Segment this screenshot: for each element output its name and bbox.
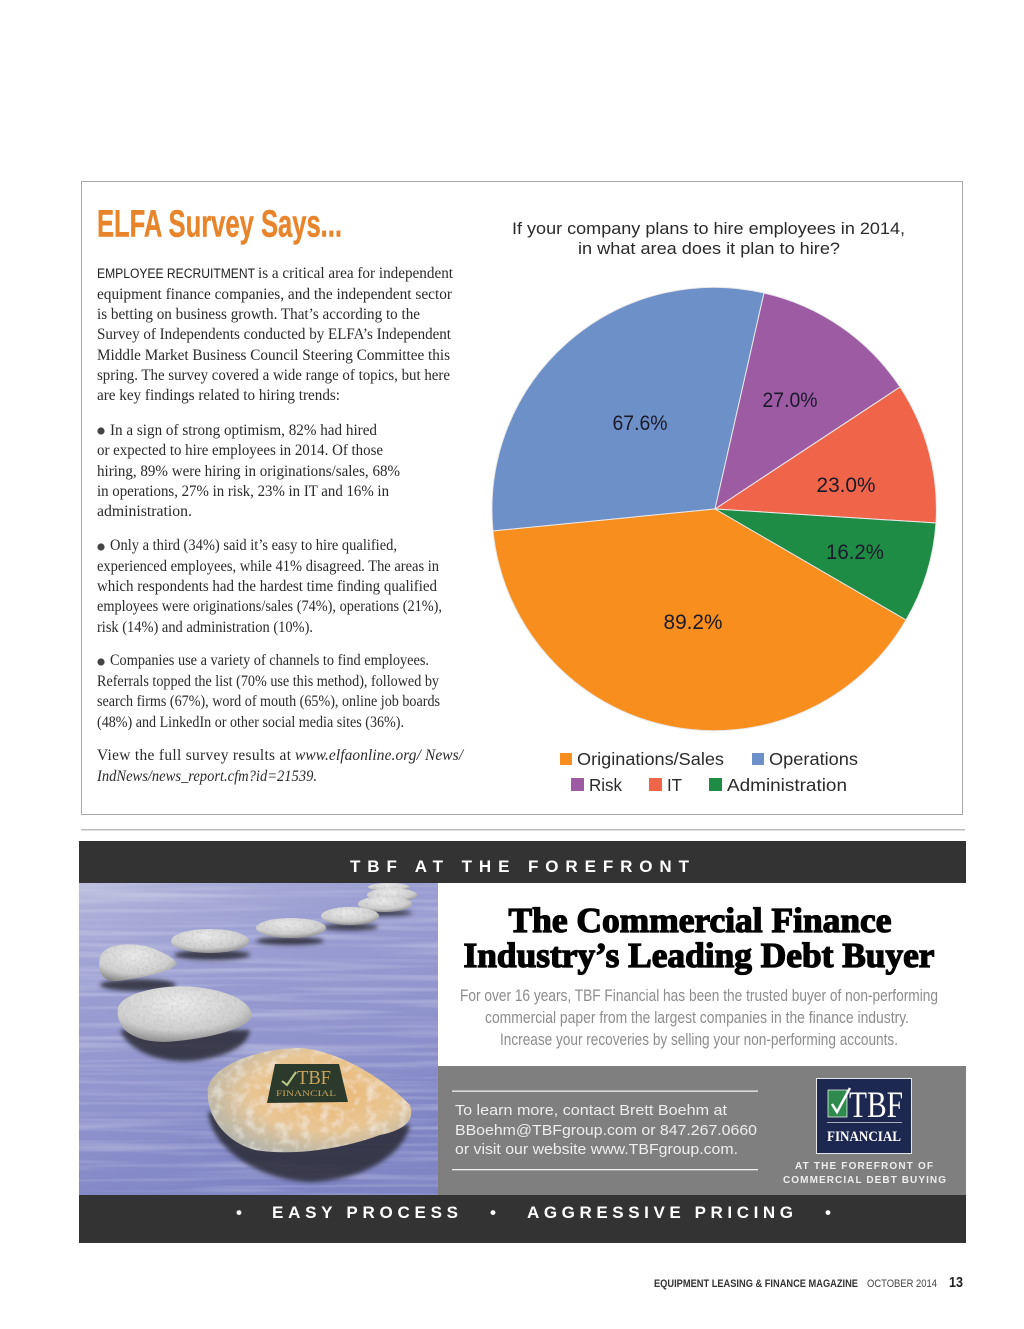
golden logo stone [208,1048,411,1152]
page footer: OCTOBER 2014 [867,1278,937,1290]
intro paragraph: EMPLOYEE RECRUITMENT [97,266,255,281]
chart title [512,219,905,258]
ad bottom banner text [236,1203,831,1222]
grey stones [99,883,417,1042]
logo tagline [783,1161,946,1186]
bullet: qualified employees: risk (14%) and administration (10%). [97,619,313,636]
stepping stones photo [79,883,438,1195]
ad description: commercial paper from the largest companies in the finance industry. [485,1008,909,1027]
stone logo: TBF [297,1067,331,1089]
ad bottom banner text: • [825,1203,831,1222]
chart legend: Risk [589,775,622,795]
ad contact panel [438,1066,966,1195]
intro paragraph: are key findings related to hiring trends: [97,387,340,404]
ad bottom banner text: • [236,1203,242,1222]
ad top banner text: TBF AT THE FOREFRONT [350,857,690,876]
pie value labels [612,389,884,634]
stone logo [267,1064,348,1103]
pie value labels: 67.6% [612,412,668,435]
bullet: hiring channels [97,652,440,731]
bullet: hiring channels: search firms (67%), word of mouth (65%), online job boards [97,693,440,710]
ad bottom banner text: • [490,1203,496,1222]
intro paragraph: Survey of Independents conducted by ELFA’s Independent [97,326,452,343]
chart legend: IT [667,775,682,795]
reflections [100,910,412,1182]
bullet: hiring optimism: administration. [97,503,192,520]
pie value labels: 23.0% [816,474,876,497]
contact text: BBoehm@TBFgroup.com or 847.267.0660 [455,1122,757,1139]
bullet: hiring optimism: hiring, 89% were hiring in originations/sales, 68% [97,463,400,480]
page footer: EQUIPMENT LEASING & FINANCE MAGAZINE [654,1278,858,1290]
contact text: To learn more, contact Brett Boehm at [455,1102,728,1119]
survey link text [96,747,465,785]
logo tagline: COMMERCIAL DEBT BUYING [783,1175,946,1186]
ad headline [464,901,934,975]
intro paragraph: spring. The survey covered a wide range of topics, but here [97,367,450,384]
chart title: in what area does it plan to hire? [578,239,840,258]
bullet: hiring optimism: In a sign of strong optimism, 82% had hired [110,422,377,439]
ad bottom banner text: AGGRESSIVE PRICING [527,1203,793,1222]
chart legend: Operations [769,749,858,769]
bullet: qualified employees: experienced employees, while 41% disagreed. The areas in [97,558,439,575]
bullet: hiring optimism [97,422,400,520]
bullet: hiring optimism: in operations, 27% in risk, 23% in IT and 16% in [97,483,389,500]
chart legend: Administration [727,775,847,795]
TBF logo: TBF [849,1085,903,1126]
survey link text: www.elfaonline.org/ News/ [295,747,465,764]
pie value labels: 16.2% [826,541,884,564]
ad description: Increase your recoveries by selling your non-performing accounts. [500,1030,898,1049]
ad description [460,986,938,1049]
survey panel [82,182,962,814]
bullet: qualified employees: Only a third (34%) said it’s easy to hire qualified, [110,537,397,554]
bullet: hiring channels: (48%) and LinkedIn or other social media sites (36%). [97,714,404,731]
TBF logo: FINANCIAL [827,1129,901,1145]
pie value labels: 27.0% [762,389,818,412]
TBF advertisement [79,841,966,1243]
heading: ELFA Survey Says: ELFA Survey Says... [97,204,342,246]
intro paragraph: is a critical area for independent [258,265,454,282]
ad headline: Industry’s Leading Debt Buyer [464,936,934,975]
ad headline panel [438,883,966,1066]
ad headline: The Commercial Finance [508,901,892,940]
bullet: qualified employees: which respondents had the hardest time finding qualified [97,578,437,595]
stone logo: FINANCIAL [276,1089,336,1098]
intro paragraph: equipment finance companies, and the independent sector [97,286,452,303]
survey link text: View the full survey results at [97,747,292,764]
contact text: or visit our website www.TBFgroup.com. [455,1141,738,1158]
bullet: qualified employees: employees were originations/sales (74%), operations (21%), [97,598,442,615]
chart legend [560,749,858,795]
chart title: If your company plans to hire employees in 2014, [512,219,905,238]
ad bottom banner text: EASY PROCESS [272,1203,458,1222]
intro paragraph [97,265,454,404]
intro paragraph: is betting on business growth. That’s according to the [97,306,420,323]
pie chart [492,287,936,731]
logo tagline: AT THE FOREFRONT OF [795,1161,933,1172]
bullet: hiring optimism: or expected to hire employees in 2014. Of those [97,442,383,459]
page footer: 13 [949,1275,963,1291]
bullet: qualified employees [97,537,442,636]
intro paragraph: Middle Market Business Council Steering Committee this [97,347,450,364]
chart legend: Originations/Sales [577,749,724,769]
TBF logo [816,1078,912,1154]
pie value labels: 89.2% [664,611,722,634]
survey link text: IndNews/news_report.cfm?id=21539. [96,768,317,785]
page footer [654,1275,963,1291]
bullet: hiring channels: Referrals topped the list (70% use this method), followed by [97,673,439,690]
bullet: hiring channels: Companies use a variety of channels to find employees. [110,652,429,669]
contact text [455,1102,757,1158]
